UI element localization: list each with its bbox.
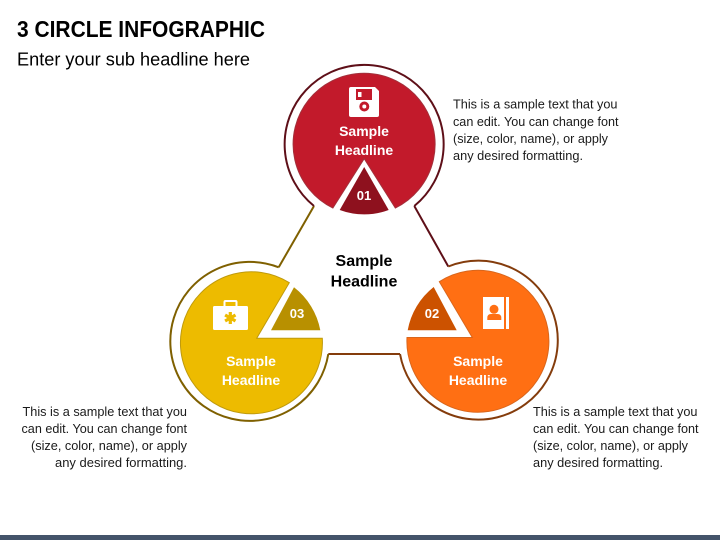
wedge 01 bbox=[340, 167, 389, 214]
number 02: 02 bbox=[425, 306, 439, 321]
connector: top to right bbox=[414, 206, 448, 266]
text block: bottom left: can edit. You can change font bbox=[22, 421, 187, 436]
outer ring 02 bbox=[400, 261, 558, 420]
yellow pie 03 bbox=[180, 272, 322, 414]
panel: circle 02 bbox=[400, 261, 558, 420]
text block: top right: This is a sample text that you bbox=[453, 96, 618, 112]
text block: bottom right: This is a sample text that you bbox=[533, 404, 698, 419]
panel: circle 01 bbox=[285, 65, 444, 214]
text block: top right: (size, color, name), or apply bbox=[453, 131, 608, 146]
text block: bottom right: (size, color, name), or apply bbox=[533, 438, 688, 453]
subtitle: Enter your sub headline here bbox=[17, 50, 250, 70]
text block: bottom right: can edit. You can change font bbox=[533, 421, 699, 436]
icon: floppy disk bbox=[349, 87, 379, 117]
orange pie 02 bbox=[407, 270, 549, 412]
text block: bottom left bbox=[22, 404, 187, 470]
panel: circle 01: Headline bbox=[335, 142, 393, 158]
outer ring 01 bbox=[285, 65, 444, 206]
wedge 02 bbox=[408, 287, 457, 330]
icon: medical case bbox=[213, 301, 248, 330]
connector: left to right bbox=[328, 353, 400, 355]
red pie 01 bbox=[293, 73, 435, 208]
number 01: 01 bbox=[357, 188, 371, 203]
text block: bottom left: any desired formatting. bbox=[55, 455, 187, 470]
panel: circle 03 bbox=[170, 262, 328, 421]
text block: bottom left: (size, color, name), or apply bbox=[31, 438, 187, 453]
text block: bottom left: This is a sample text that you bbox=[22, 404, 187, 419]
icon: address book bbox=[483, 297, 509, 329]
center heading: Sample bbox=[336, 253, 393, 270]
heading 01: Sample bbox=[339, 123, 389, 139]
outer ring 03 bbox=[170, 262, 328, 421]
wedge 03 bbox=[271, 287, 320, 330]
title: 3 CIRCLE INFOGRAPHIC bbox=[17, 16, 265, 42]
heading 02: Sample bbox=[453, 353, 503, 369]
text block: bottom right: any desired formatting. bbox=[533, 455, 663, 470]
text block: top right: any desired formatting. bbox=[453, 148, 583, 163]
footer bar bbox=[0, 535, 720, 540]
panel: circle 02: Headline bbox=[449, 372, 507, 388]
center heading bbox=[331, 253, 397, 290]
heading 03: Sample bbox=[226, 353, 276, 369]
panel: circle 03: Headline bbox=[222, 372, 280, 388]
text block: bottom right bbox=[533, 404, 699, 470]
text block: top right bbox=[453, 96, 619, 163]
number 03: 03 bbox=[290, 306, 304, 321]
text block: top right: can edit. You can change font bbox=[453, 114, 619, 129]
center heading: Headline bbox=[331, 274, 397, 290]
connector: top to left bbox=[279, 206, 314, 267]
